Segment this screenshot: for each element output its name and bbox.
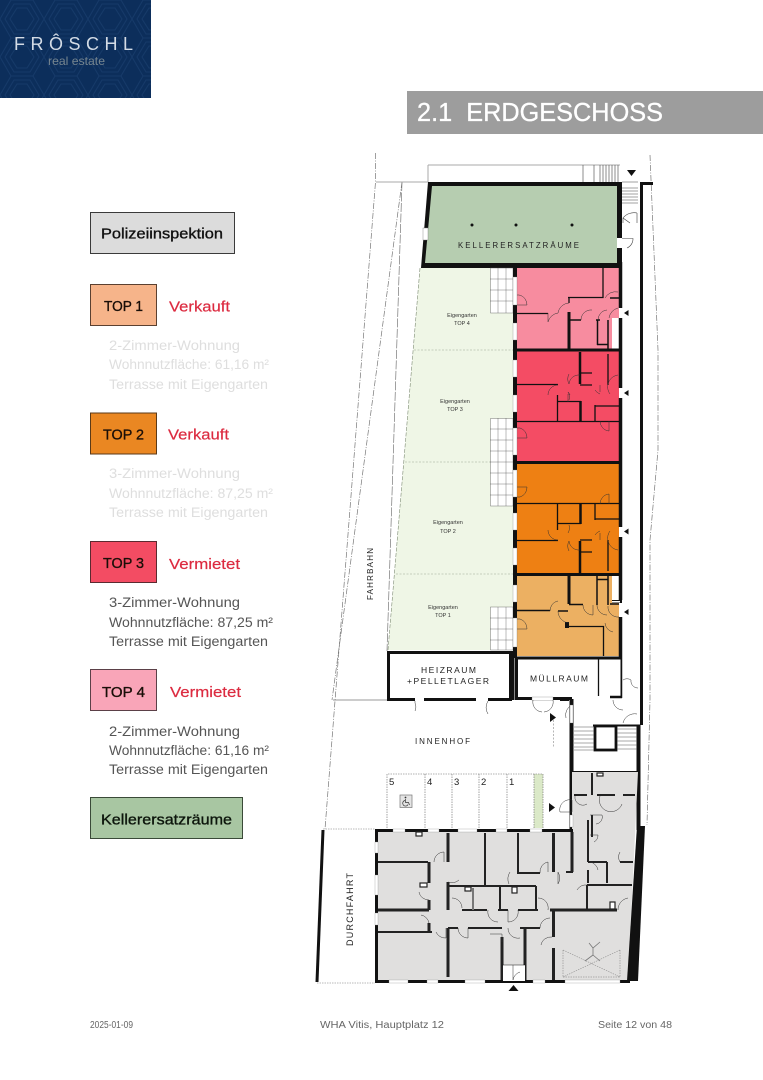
- garden areas: Eigengarten: [440, 399, 470, 405]
- legend: TOP 1: Wohnnutzfläche: 61,16 m²: [109, 357, 270, 372]
- parking spaces: 5: [389, 777, 394, 788]
- site boundary lines: [325, 153, 658, 829]
- courtyard: [415, 720, 554, 748]
- door swings: [419, 796, 628, 945]
- legend: TOP 1: Verkauft: [169, 298, 231, 316]
- room: Müllraum: MÜLLRAUM: [530, 674, 588, 684]
- unit: TOP 4: [517, 268, 622, 350]
- floor plan: [317, 153, 658, 991]
- garden areas: TOP 2: [440, 529, 456, 535]
- windows: garden facade: [513, 277, 517, 647]
- room: Kellerersatzräume: KELLERERSATZRÄUME: [458, 241, 579, 250]
- icon: accessible parking: [400, 795, 412, 808]
- title banner: [407, 91, 763, 134]
- footer: WHA Vitis, Hauptplatz 12: [320, 1020, 444, 1031]
- title banner: 2.1 ERDGESCHOSS: [417, 97, 663, 127]
- legend: Kellerersatzräume: Kellerersatzräume: [101, 812, 232, 828]
- legend: TOP 2: Wohnnutzfläche: 87,25 m²: [109, 486, 274, 501]
- legend: TOP 2: 3-Zimmer-Wohnung: [109, 466, 240, 481]
- garden areas: Eigengarten: [447, 313, 477, 319]
- parking spaces: [387, 774, 543, 828]
- legend: TOP 2: [90, 413, 274, 520]
- logo: Fröschl real estate: [0, 0, 151, 98]
- footer: 2025-01-09: [90, 1020, 133, 1031]
- unit: TOP 3: [513, 350, 622, 462]
- legend: TOP 2: Terrasse mit Eigengarten: [109, 505, 268, 520]
- legend: TOP 4: Vermietet: [170, 684, 242, 701]
- Durchfahrt passage: DURCHFAHRT: [345, 872, 355, 946]
- parking spaces: 3: [454, 777, 459, 788]
- upper stair and entrance: [583, 165, 638, 248]
- entrance vestibule: [513, 965, 520, 980]
- garden areas: TOP 4: [454, 321, 470, 327]
- legend: TOP 3: 3-Zimmer-Wohnung: [109, 595, 240, 610]
- footer: [90, 1020, 672, 1031]
- legend: Polizeiinspektion: Polizeiinspektion: [101, 226, 223, 242]
- legend: TOP 1: Terrasse mit Eigengarten: [109, 377, 268, 392]
- arrow: upper entrance: [627, 170, 636, 176]
- Durchfahrt passage: [317, 829, 375, 983]
- legend: TOP 1: 2-Zimmer-Wohnung: [109, 338, 240, 353]
- shafts: [416, 773, 615, 909]
- courtyard: INNENHOF: [415, 737, 470, 746]
- label: Fahrbahn: FAHRBAHN: [366, 548, 375, 600]
- parking spaces: 2: [481, 777, 486, 788]
- legend: TOP 4: Wohnnutzfläche: 61,16 m²: [109, 743, 270, 758]
- arrows: unit entrances: [624, 310, 628, 615]
- logo: Fröschl real estate: FRÔSCHL: [14, 33, 133, 54]
- room: Heizraum + Pelletlager: +PELLETLAGER: [407, 676, 489, 686]
- legend: TOP 4: TOP 4: [102, 684, 145, 701]
- logo: Fröschl real estate: real estate: [48, 54, 105, 68]
- garden areas: Eigengarten: [428, 605, 458, 611]
- parking spaces: 1: [509, 777, 514, 788]
- room: Heizraum + Pelletlager: HEIZRAUM: [421, 665, 476, 675]
- legend: TOP 2: TOP 2: [103, 426, 144, 444]
- room: Müllraum: [513, 651, 638, 712]
- legend: TOP 1: TOP 1: [104, 298, 143, 315]
- parking spaces: 4: [427, 777, 432, 788]
- footer: Seite 12 von 48: [598, 1020, 672, 1031]
- legend: TOP 1: [90, 284, 270, 392]
- arrow: courtyard entrance upper: [550, 713, 556, 722]
- stair core: [560, 699, 640, 831]
- legend: Polizeiinspektion: [90, 212, 234, 254]
- unit: TOP 1: [513, 574, 622, 656]
- garden areas: TOP 1: [435, 613, 451, 619]
- legend: TOP 4: Terrasse mit Eigengarten: [109, 762, 268, 777]
- room: Heizraum + Pelletlager: [388, 652, 510, 714]
- garden areas: Eigengarten: [433, 520, 463, 526]
- arrow: courtyard entrance lower: [549, 803, 555, 812]
- legend: TOP 2: Verkauft: [168, 426, 230, 444]
- room: Kellerersatzräume: [421, 182, 622, 268]
- legend: TOP 3: Terrasse mit Eigengarten: [109, 634, 268, 649]
- legend: TOP 3: [90, 542, 274, 649]
- terraces: [490, 268, 513, 650]
- legend: TOP 3: TOP 3: [103, 555, 144, 572]
- legend: TOP 3: Vermietet: [169, 556, 241, 573]
- legend: Kellerersatzräume: [90, 798, 242, 838]
- atrium: skylight and fixture: [563, 942, 620, 977]
- legend: TOP 4: 2-Zimmer-Wohnung: [109, 724, 240, 739]
- unit: TOP 2: [517, 464, 619, 574]
- legend: TOP 4: [90, 670, 270, 777]
- arrow: main entrance: [508, 985, 518, 991]
- garden areas: TOP 3: [447, 407, 463, 413]
- police station floor: [375, 772, 645, 983]
- windows: [375, 815, 620, 983]
- garden areas: [388, 268, 513, 650]
- legend: TOP 3: Wohnnutzfläche: 87,25 m²: [109, 615, 274, 630]
- outer walls: [375, 830, 630, 982]
- interior walls: [378, 773, 635, 980]
- walls: central block and corridor: [515, 183, 653, 725]
